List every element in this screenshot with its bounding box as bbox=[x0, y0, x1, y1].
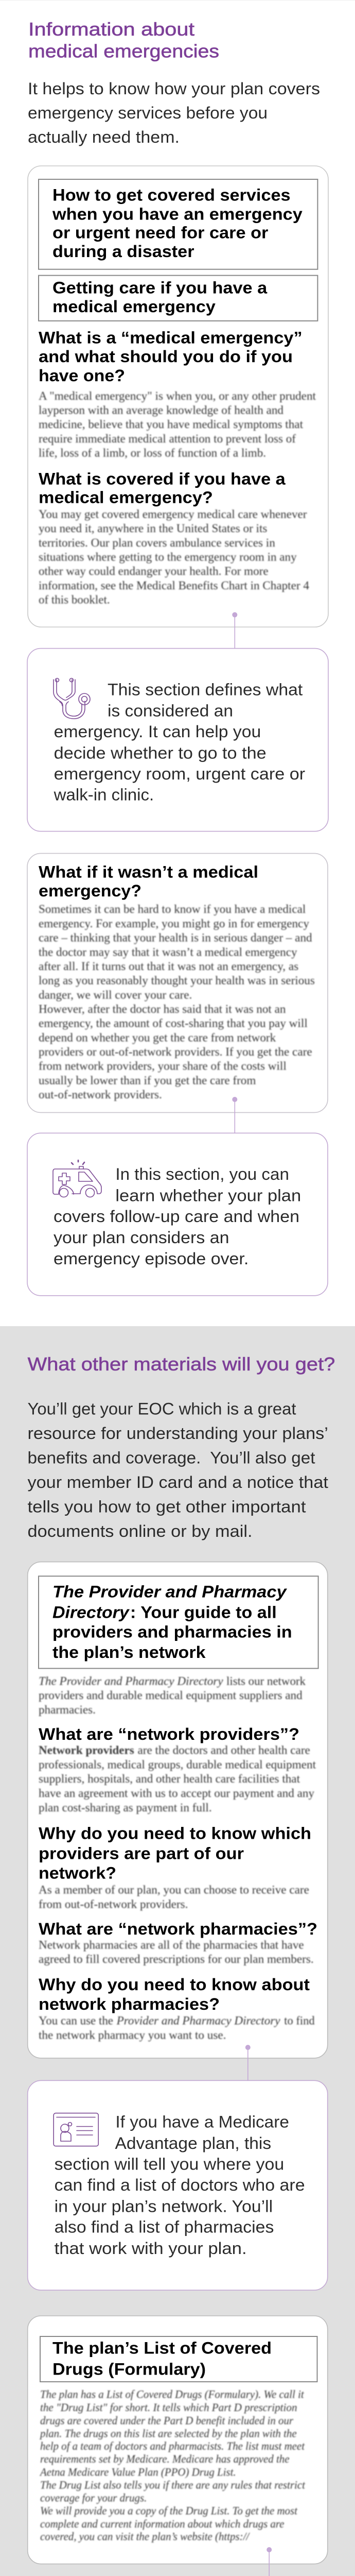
body text: what is covered: of this booklet. bbox=[39, 594, 110, 606]
body text: use the directory: to find bbox=[284, 2014, 315, 2027]
intro text bbox=[28, 79, 320, 146]
callout text: Advantage plan, this bbox=[115, 2134, 271, 2153]
heading: network pharmacies: What are “network pharmacies”? bbox=[39, 1920, 317, 1938]
body text: what is covered: situations where getting to the emergency room in any bbox=[39, 551, 297, 564]
panel: provider and pharmacy directory bbox=[28, 1562, 328, 2058]
body text: formulary bbox=[39, 2388, 306, 2543]
connector: panel to callout 4 bbox=[267, 2547, 272, 2576]
heading: what is a medical emergency: What is a “medical emergency” bbox=[39, 328, 303, 347]
section heading: what other materials: What other materials will you get? bbox=[28, 1353, 335, 1375]
body text: not an emergency: providers or out-of-network providers. If you get the care bbox=[39, 1045, 312, 1058]
heading box: provider directory bbox=[39, 1576, 318, 1668]
heading box: list of covered drugs bbox=[40, 2336, 317, 2382]
body text: network pharmacies: Network pharmacies are all of the pharmacies that have bbox=[39, 1938, 304, 1952]
heading box: getting care: medical emergency bbox=[52, 297, 216, 316]
section intro text: resource for understanding your plans’ bbox=[28, 1424, 328, 1443]
connector: panel to callout 2 bbox=[232, 1097, 237, 1133]
panel: getting care in an emergency bbox=[28, 166, 328, 627]
section intro text: your member ID card and a notice that bbox=[28, 1473, 328, 1492]
heading: network providers: What are “network providers”? bbox=[39, 1725, 299, 1743]
body text: not an emergency: Sometimes it can be hard to know if you have a medical bbox=[39, 903, 306, 916]
body text: formulary: The plan has a List of Covered Drugs (Formulary). We call it bbox=[40, 2388, 305, 2401]
body text: not an emergency: usually be lower than if you get the care from bbox=[39, 1074, 256, 1087]
title: information about medical emergencies: medical emergencies bbox=[28, 40, 219, 62]
heading box: list of covered drugs: The plan’s List of Covered bbox=[52, 2339, 272, 2358]
body text: formulary: Aetna Medicare Value Plan (PPO) Drug List. bbox=[39, 2465, 236, 2478]
callout text: your plan considers an bbox=[54, 1228, 229, 1247]
heading box: list of covered drugs: Drugs (Formulary) bbox=[52, 2360, 206, 2379]
body text: network providers: plan cost-sharing as payment in full. bbox=[39, 1801, 212, 1814]
intro text: actually need them. bbox=[28, 128, 180, 146]
section intro text: tells you how to get other important bbox=[28, 1497, 306, 1516]
body text: directory: The Provider and Pharmacy Directory bbox=[39, 1674, 223, 1687]
heading: why know pharmacies: network pharmacies? bbox=[39, 1995, 220, 2013]
icon: ambulance bbox=[53, 1160, 101, 1197]
heading: why know providers: providers are part of our bbox=[39, 1844, 244, 1863]
body text: formulary: covered, you can visit the plan’s website (https:// bbox=[40, 2530, 250, 2543]
body text: directory: providers and durable medical equipment suppliers and bbox=[39, 1689, 303, 1702]
body text: what is covered bbox=[39, 508, 309, 606]
heading box: how to get covered services: during a disaster bbox=[52, 242, 194, 261]
heading box: provider directory: Directory bbox=[52, 1603, 130, 1622]
section intro text: You’ll get your EOC which is a great bbox=[28, 1400, 296, 1418]
body text: out of network: from out-of-network providers. bbox=[39, 1897, 188, 1910]
body text: what is covered: territories. Our plan covers ambulance services in bbox=[39, 536, 275, 549]
body text: formulary: the "Drug List" for short. It tells which Part D prescription bbox=[40, 2401, 297, 2414]
heading box: how to get covered services: How to get covered services bbox=[52, 185, 291, 204]
heading box: provider directory: providers and pharmacies in bbox=[52, 1622, 292, 1641]
callout text: If you have a Medicare bbox=[115, 2112, 289, 2131]
heading box: getting care bbox=[39, 276, 317, 321]
callout text bbox=[54, 680, 306, 804]
body text: network providers bbox=[39, 1743, 316, 1814]
icon: stethoscope bbox=[54, 678, 90, 719]
callout text: decide whether to go to the bbox=[54, 744, 267, 762]
title: information about medical emergencies: Information about bbox=[28, 19, 194, 40]
heading: what is a medical emergency: have one? bbox=[39, 366, 125, 385]
body text: medical emergency definition: A "medical emergency" is when you, or any other prudent bbox=[39, 389, 316, 402]
body text: not an emergency: danger, we will cover your care. bbox=[39, 988, 192, 1001]
body text: not an emergency: depend on whether you get the care from network bbox=[39, 1031, 276, 1044]
heading: what is covered: What is covered if you have a bbox=[39, 469, 286, 488]
body text: out of network: As a member of our plan, you can choose to receive care bbox=[39, 1884, 309, 1896]
heading box: how to get covered services bbox=[39, 179, 317, 269]
icon: id card bbox=[54, 2113, 98, 2146]
callout text: learn whether your plan bbox=[115, 1186, 301, 1205]
body text: not an emergency: emergency, the amount of cost-sharing that you pay will bbox=[39, 1017, 308, 1030]
section intro text: documents online or by mail. bbox=[28, 1522, 253, 1540]
callout text: is considered an bbox=[108, 701, 233, 720]
heading: why know providers bbox=[39, 1824, 311, 1883]
body text: formulary: drugs are covered under the Part D benefit included in our bbox=[40, 2414, 293, 2427]
body text: medical emergency definition bbox=[39, 389, 316, 460]
heading: what is a medical emergency bbox=[39, 328, 303, 385]
body text: use the directory: the network pharmacy you want to use. bbox=[39, 2029, 226, 2042]
heading: what if it was not: What if it wasn’t a medical bbox=[39, 862, 258, 881]
section intro text bbox=[28, 1400, 328, 1540]
panel: what if it was not an emergency bbox=[27, 853, 328, 1112]
callout text: that work with your plan. bbox=[55, 2239, 247, 2258]
body text: network providers: professionals, medical groups, durable medical equipment bbox=[39, 1758, 316, 1771]
body text: network providers: Network providers bbox=[39, 1743, 134, 1757]
heading box: how to get covered services: or urgent need for care or bbox=[52, 224, 268, 242]
intro text: emergency services before you bbox=[28, 104, 268, 122]
heading: what is covered bbox=[39, 469, 286, 507]
body text: medical emergency definition: life, loss of a limb, or loss of function of a limb. bbox=[39, 446, 266, 460]
heading: what if it was not bbox=[39, 862, 258, 900]
callout text: also find a list of pharmacies bbox=[55, 2218, 274, 2236]
body text: use the directory: You can use the bbox=[39, 2014, 113, 2027]
body text: not an emergency: However, after the doctor has said that it was not an bbox=[39, 1003, 286, 1015]
body text: network providers: suppliers, hospitals, and other health care facilities that bbox=[39, 1772, 300, 1785]
body text: medical emergency definition: layperson with an average knowledge of health and bbox=[39, 404, 283, 416]
heading box: how to get covered services: when you have an emergency bbox=[52, 205, 303, 223]
callout text: can find a list of doctors who are bbox=[55, 2176, 305, 2194]
callout text: covers follow-up care and when bbox=[54, 1207, 299, 1226]
heading: what is covered: medical emergency? bbox=[39, 488, 213, 507]
body text: not an emergency: long as you reasonably thought your health was in serious bbox=[39, 974, 315, 987]
body text: not an emergency: after all. If it turns out that it was not an emergency, as bbox=[39, 960, 298, 973]
callout: defines an emergency bbox=[27, 649, 328, 832]
connector: panel to callout 3 bbox=[245, 2045, 251, 2081]
callout text: walk-in clinic. bbox=[54, 786, 154, 804]
panel: list of covered drugs bbox=[28, 2316, 328, 2564]
callout text: This section defines what bbox=[108, 680, 303, 699]
body text: directory bbox=[39, 1674, 306, 1716]
section intro text: benefits and coverage. You’ll also get bbox=[28, 1449, 315, 1467]
body text: medical emergency definition: require immediate medical attention to prevent loss of bbox=[39, 432, 296, 445]
body text: formulary: The Drug List also tells you if there are any rules that restrict bbox=[40, 2478, 306, 2491]
body text: use the directory: Provider and Pharmacy Directory bbox=[116, 2014, 280, 2027]
body text: formulary: We will provide you a copy of the Drug List. To get the most bbox=[40, 2504, 298, 2517]
body text: formulary: help of a team of doctors and pharmacists. The list must meet bbox=[40, 2439, 305, 2452]
heading box: getting care: Getting care if you have a bbox=[52, 278, 267, 297]
heading: what is a medical emergency: and what should you do if you bbox=[39, 347, 293, 366]
heading box: provider directory: the plan’s network bbox=[52, 1643, 206, 1662]
body text: not an emergency: out-of-network providers. bbox=[39, 1088, 162, 1101]
body text: network pharmacies: agreed to fill covered prescriptions for our plan members. bbox=[39, 1953, 314, 1965]
body text: what is covered: information, see the Medical Benefits Chart in Chapter 4 bbox=[39, 579, 309, 592]
body text: not an emergency bbox=[39, 903, 315, 1101]
body text: use the directory bbox=[39, 2014, 315, 2042]
callout text: In this section, you can bbox=[115, 1165, 289, 1183]
callout: medicare advantage bbox=[28, 2080, 328, 2290]
body text: not an emergency: from network providers, your share of the costs will bbox=[39, 1060, 287, 1073]
body text: network pharmacies bbox=[39, 1938, 314, 1965]
body text: directory: pharmacies. bbox=[39, 1703, 96, 1716]
callout text bbox=[54, 1165, 301, 1268]
heading box: provider directory: : Your guide to all bbox=[130, 1603, 277, 1622]
heading: why know pharmacies: Why do you need to know about bbox=[39, 1975, 310, 1994]
body text: medical emergency definition: medicine, believe that you have medical symptoms that bbox=[39, 418, 304, 431]
callout text bbox=[55, 2112, 305, 2258]
heading box: provider directory: The Provider and Pharmacy bbox=[52, 1583, 288, 1601]
callout: follow-up care bbox=[27, 1133, 328, 1296]
body text: formulary: coverage for your drugs. bbox=[40, 2492, 147, 2504]
heading: why know pharmacies bbox=[39, 1975, 310, 2013]
callout text: emergency episode over. bbox=[54, 1249, 248, 1268]
callout text: emergency room, urgent care or bbox=[54, 765, 306, 783]
body text: out of network bbox=[39, 1884, 309, 1910]
body text: what is covered: other way could endanger your health. For more bbox=[39, 565, 269, 578]
body text: formulary: requirements set by Medicare. Medicare has approved the bbox=[40, 2452, 290, 2465]
callout text: in your plan’s network. You’ll bbox=[55, 2197, 273, 2215]
body text: not an emergency: the doctor may say that it wasn’t a medical emergency bbox=[39, 945, 297, 958]
body text: directory: lists our network bbox=[226, 1674, 306, 1687]
body text: what is covered: You may get covered emergency medical care whenever bbox=[39, 508, 307, 520]
body text: formulary: complete and current information about which drugs are bbox=[40, 2517, 285, 2530]
body text: not an emergency: emergency. For example, you might go in for emergency bbox=[39, 917, 309, 930]
heading: why know providers: Why do you need to know which bbox=[39, 1824, 311, 1842]
body text: formulary: plan. The drugs on this list are selected by the plan with the bbox=[39, 2427, 297, 2439]
title: information about medical emergencies bbox=[28, 19, 219, 62]
body text: not an emergency: care – thinking that your health is in serious danger – and bbox=[39, 931, 312, 944]
body text: network providers: are the doctors and other health care bbox=[138, 1743, 310, 1757]
body text: what is covered: you need it, anywhere in the United States or its bbox=[39, 522, 267, 535]
callout text: emergency. It can help you bbox=[54, 722, 261, 741]
intro text: It helps to know how your plan covers bbox=[28, 79, 320, 98]
callout text: section will tell you where you bbox=[55, 2155, 284, 2173]
heading: what if it was not: emergency? bbox=[39, 882, 141, 900]
body text: network providers: have an agreement with us to accept our payment and any bbox=[39, 1787, 314, 1800]
heading: why know providers: network? bbox=[39, 1864, 116, 1883]
connector: panel to callout 1 bbox=[232, 612, 237, 649]
